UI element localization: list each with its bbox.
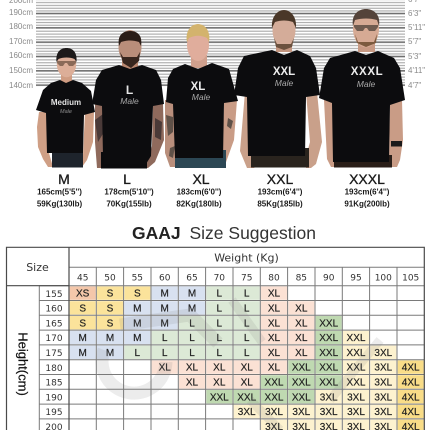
imperial height scale bbox=[408, 0, 425, 90]
row 180 bbox=[152, 360, 424, 374]
metric height scale: 150cm bbox=[9, 66, 33, 75]
row 165: S bbox=[79, 318, 86, 329]
row 175: L bbox=[162, 348, 168, 359]
imperial height scale: 4'7" bbox=[408, 81, 421, 90]
height row numbers: 165 bbox=[45, 319, 63, 329]
row 180: XL bbox=[186, 363, 199, 374]
metric height scale: 190cm bbox=[9, 8, 33, 17]
row 185: 4XL bbox=[402, 378, 420, 388]
imperial height scale: 6'3" bbox=[408, 9, 421, 18]
size label L: 70Kg(155lb) bbox=[106, 200, 152, 208]
row 175: 3XL bbox=[374, 348, 393, 359]
weight column numbers: 65 bbox=[186, 274, 198, 284]
row 155: L bbox=[244, 289, 250, 300]
weight column numbers bbox=[77, 274, 419, 284]
row 160: L bbox=[217, 304, 223, 314]
row 170 bbox=[70, 331, 369, 344]
size label L bbox=[104, 171, 154, 208]
size label L: 178cm(5'10'') bbox=[104, 188, 154, 196]
size label XXXL: 193cm(6'4'') bbox=[345, 188, 390, 196]
imperial height scale: 5'11" bbox=[408, 23, 425, 32]
row 170: M bbox=[133, 333, 141, 344]
model: XXXL: Male bbox=[357, 79, 375, 89]
weight column numbers: 60 bbox=[159, 274, 171, 284]
row 185: XXL bbox=[319, 378, 339, 388]
row 195: 3XL bbox=[320, 407, 338, 418]
row 175: L bbox=[217, 348, 223, 359]
weight column numbers: 85 bbox=[296, 274, 307, 284]
row 165: M bbox=[161, 318, 169, 329]
row 180: XL bbox=[241, 363, 253, 374]
metric height scale: 180cm bbox=[9, 22, 33, 31]
row 195: 3XL bbox=[238, 407, 256, 418]
faint watermark over table bbox=[102, 300, 380, 430]
row 195: 3XL bbox=[347, 407, 365, 418]
model: XXL: XXL bbox=[273, 66, 295, 78]
size label M: 165cm(5'5'') bbox=[37, 188, 82, 196]
row 155: S bbox=[134, 289, 141, 300]
row 185: XL bbox=[213, 378, 226, 388]
weight column numbers: 80 bbox=[268, 274, 280, 284]
imperial height scale: 4'11" bbox=[408, 66, 425, 75]
row 170: XL bbox=[295, 333, 308, 344]
size label XXXL bbox=[344, 171, 390, 208]
size label XXL bbox=[257, 171, 303, 208]
row 175: XL bbox=[295, 348, 308, 359]
size label XXXL: XXXL bbox=[349, 171, 385, 187]
size label XL: 82Kg(180lb) bbox=[176, 200, 222, 208]
height row numbers: 185 bbox=[45, 379, 63, 389]
row 180: XL bbox=[159, 363, 171, 374]
model: XXXL: XXXL bbox=[351, 66, 383, 78]
height row numbers: 175 bbox=[45, 349, 63, 359]
row 155: XS bbox=[76, 289, 90, 300]
model: XXXL bbox=[319, 9, 405, 168]
row 190: 3XL bbox=[320, 392, 338, 403]
row 185: XL bbox=[186, 378, 199, 388]
size label M bbox=[37, 171, 83, 208]
row 170: XXL bbox=[347, 333, 366, 344]
row 195: 3XL bbox=[374, 407, 393, 418]
row 185: XL bbox=[241, 378, 253, 388]
size label M: 59Kg(130lb) bbox=[37, 200, 83, 208]
row 170: L bbox=[189, 333, 195, 344]
model: M: Medium bbox=[51, 98, 81, 107]
row 190 bbox=[206, 390, 424, 403]
row 185 bbox=[179, 375, 424, 389]
height row numbers: 190 bbox=[45, 393, 63, 403]
row 170: M bbox=[79, 333, 87, 344]
metric height scale bbox=[9, 0, 33, 90]
row 190: 4XL bbox=[402, 392, 420, 403]
row 180: XL bbox=[268, 363, 281, 374]
size label XXL: 193cm(6'4'') bbox=[258, 188, 303, 196]
row 175: XXL bbox=[347, 348, 366, 359]
model: L: Male bbox=[120, 96, 139, 106]
row 195 bbox=[234, 405, 424, 418]
row 195: 3XL bbox=[265, 407, 283, 418]
row 185: XXL bbox=[265, 378, 284, 388]
weight column numbers: 90 bbox=[323, 274, 335, 284]
row 180: XL bbox=[213, 363, 226, 374]
row 180: 4XL bbox=[402, 363, 420, 374]
table heading: Height: Height(cm) bbox=[16, 332, 30, 396]
row 170: L bbox=[162, 333, 168, 344]
size label XXXL: 91Kg(200lb) bbox=[344, 200, 390, 208]
weight column numbers: 95 bbox=[350, 274, 362, 284]
weight column numbers: 75 bbox=[241, 274, 252, 284]
metric height scale: 170cm bbox=[9, 37, 33, 46]
row 160: L bbox=[244, 304, 250, 314]
row 160 bbox=[70, 301, 314, 315]
size label XXL: 85Kg(185lb) bbox=[257, 200, 303, 208]
row 190: XXL bbox=[237, 392, 257, 403]
row 200 bbox=[261, 420, 424, 430]
row 175: L bbox=[135, 348, 141, 359]
imperial height scale: 5'7" bbox=[408, 37, 421, 46]
row 180: XXL bbox=[319, 363, 339, 374]
metric height scale: 140cm bbox=[9, 81, 33, 90]
weight column numbers: 45 bbox=[77, 274, 88, 284]
row 155 bbox=[70, 286, 287, 300]
weight column numbers: 55 bbox=[132, 274, 143, 284]
row 165: XL bbox=[268, 318, 281, 329]
row 160: M bbox=[133, 304, 141, 314]
row 160: M bbox=[188, 304, 196, 314]
row 165 bbox=[70, 316, 342, 329]
row 170: XL bbox=[268, 333, 281, 344]
model: L bbox=[92, 30, 164, 168]
row 175: M bbox=[79, 348, 87, 359]
weight column numbers: 100 bbox=[375, 274, 392, 284]
row 170: L bbox=[244, 333, 250, 344]
row 180: 3XL bbox=[374, 363, 393, 374]
row 170: M bbox=[106, 333, 114, 344]
row 160: XL bbox=[268, 304, 281, 314]
row 160: XL bbox=[295, 304, 308, 314]
model: XL bbox=[165, 24, 238, 168]
height row numbers: 180 bbox=[45, 364, 63, 374]
row 155: M bbox=[188, 289, 196, 300]
size label L: L bbox=[123, 171, 131, 187]
row 165: XL bbox=[295, 318, 308, 329]
size label M: M bbox=[58, 171, 70, 187]
weight column numbers: 50 bbox=[104, 274, 116, 284]
row 175: XXL bbox=[319, 348, 339, 359]
row 180: XXL bbox=[347, 363, 366, 374]
row 195: 4XL bbox=[402, 407, 420, 418]
weight column numbers: 105 bbox=[402, 274, 419, 284]
height row numbers: 170 bbox=[45, 334, 63, 344]
model: XXL bbox=[234, 10, 322, 168]
row 155: XL bbox=[268, 289, 281, 300]
row 155: L bbox=[217, 289, 223, 300]
row 165: L bbox=[189, 318, 195, 329]
row 180: XXL bbox=[292, 363, 311, 374]
row 190: 3XL bbox=[374, 392, 393, 403]
row 170: L bbox=[217, 333, 223, 344]
row 175: M bbox=[106, 348, 114, 359]
size label XL: XL bbox=[192, 171, 210, 187]
row 190: XXL bbox=[265, 392, 284, 403]
row 175: XL bbox=[268, 348, 281, 359]
title: GAAJ Size Suggestion bbox=[132, 223, 316, 243]
row 175: L bbox=[244, 348, 250, 359]
row 155: S bbox=[107, 289, 114, 300]
row 165: L bbox=[217, 318, 223, 329]
row 165: M bbox=[133, 318, 141, 329]
row 185: XXL bbox=[347, 378, 366, 388]
model: XL: Male bbox=[192, 92, 210, 102]
size label XL: 183cm(6'0'') bbox=[177, 188, 222, 196]
row 160: S bbox=[107, 304, 114, 314]
height row numbers bbox=[45, 290, 63, 430]
model: M: Male bbox=[60, 109, 72, 115]
row 160: M bbox=[161, 304, 169, 314]
height row numbers: 160 bbox=[45, 305, 63, 315]
row 190: XXL bbox=[292, 392, 311, 403]
height row numbers: 195 bbox=[45, 408, 63, 418]
row 185: XXL bbox=[292, 378, 311, 388]
model: XL: XL bbox=[191, 81, 205, 93]
height row numbers: 155 bbox=[45, 290, 63, 300]
row 165: S bbox=[107, 318, 114, 329]
row 190: 3XL bbox=[347, 392, 365, 403]
size label XXL: XXL bbox=[267, 171, 293, 187]
table heading: Size: Size bbox=[26, 261, 49, 274]
row 190: XXL bbox=[210, 392, 229, 403]
model: XXL: Male bbox=[275, 78, 293, 88]
row 185: 3XL bbox=[374, 378, 393, 388]
row 195: 3XL bbox=[292, 407, 311, 418]
row 160: S bbox=[79, 304, 86, 314]
weight column numbers: 70 bbox=[214, 274, 225, 284]
model: L: L bbox=[126, 83, 133, 97]
size label XL bbox=[176, 171, 222, 208]
imperial height scale: 5'3" bbox=[408, 52, 421, 61]
row 170: XXL bbox=[319, 333, 339, 344]
row 165: XXL bbox=[319, 318, 339, 329]
row 175 bbox=[70, 346, 396, 359]
row 155: M bbox=[161, 289, 169, 300]
row 175: L bbox=[189, 348, 195, 359]
table heading: Weight: Weight (Kg) bbox=[214, 252, 279, 264]
model: M bbox=[36, 48, 95, 168]
height ruler lines bbox=[36, 0, 405, 86]
metric height scale: 160cm bbox=[9, 51, 33, 60]
row 165: L bbox=[244, 318, 250, 329]
